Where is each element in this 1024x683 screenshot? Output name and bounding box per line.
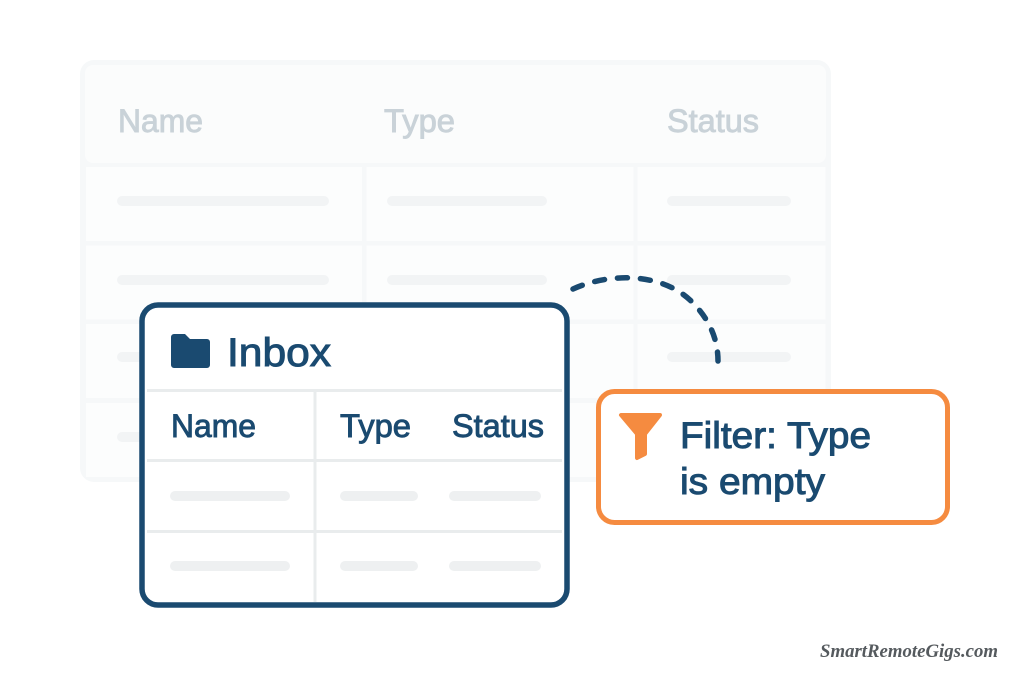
arrow: dashed connector bbox=[573, 278, 718, 361]
placeholder row bars bbox=[170, 491, 541, 571]
column headers: Name bbox=[171, 408, 256, 444]
callout: filter bbox=[598, 392, 948, 522]
watermark: SmartRemoteGigs.com bbox=[820, 641, 998, 662]
faded header labels: Status bbox=[667, 103, 759, 139]
faded placeholder bars bbox=[117, 196, 791, 442]
icon: funnel bbox=[621, 415, 660, 458]
panel: inbox table bbox=[142, 305, 567, 605]
column headers bbox=[171, 408, 544, 444]
faded header labels bbox=[118, 103, 759, 139]
column headers: Status bbox=[452, 408, 544, 444]
heading: Inbox: Inbox bbox=[227, 331, 331, 375]
column headers: Type bbox=[340, 408, 411, 444]
table grid lines bbox=[147, 389, 562, 602]
filter label: is empty bbox=[680, 461, 826, 502]
filter label bbox=[680, 415, 871, 502]
icon: folder bbox=[171, 334, 210, 368]
faded header labels: Name bbox=[118, 103, 203, 139]
faded header labels: Type bbox=[384, 103, 455, 139]
panel: faded background table bbox=[80, 60, 831, 482]
filter label: Filter: Type bbox=[680, 415, 871, 456]
